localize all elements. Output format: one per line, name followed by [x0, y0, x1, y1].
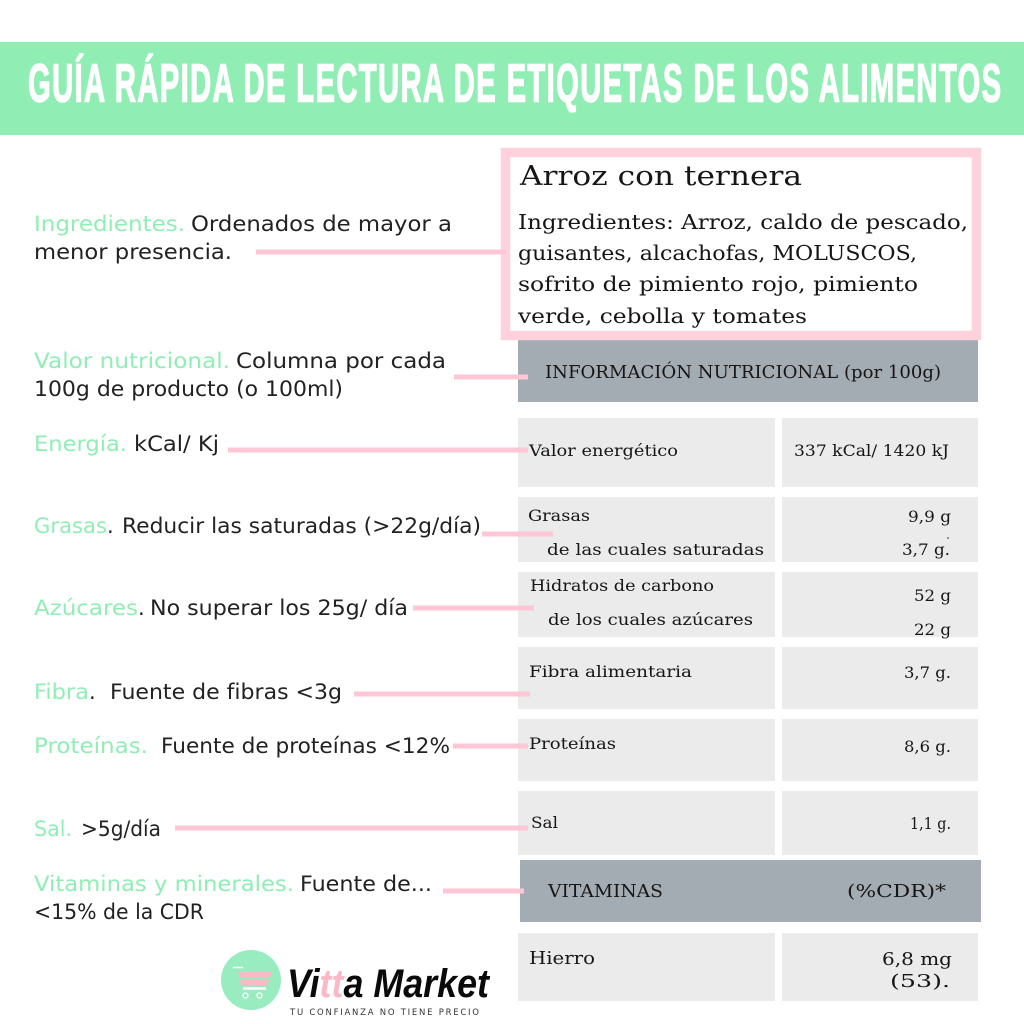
text: fibra: . — [89, 680, 96, 704]
text: azucares: No superar los 25g/ día — [150, 596, 408, 620]
row: proteinas: Proteínas — [529, 734, 616, 753]
row: valor energetico: 337 kCal/ 1420 kJ — [794, 441, 949, 460]
text: sal — [34, 817, 161, 841]
text: energia: Energía. — [34, 432, 127, 456]
text: grasas: . — [107, 514, 114, 538]
text: valor nutricional: Valor nutricional. — [34, 349, 230, 373]
row: hierro: Hierro — [529, 948, 595, 969]
ingredients list: Ingredientes: Arroz, caldo de pescado, — [518, 210, 968, 234]
row: grasas — [528, 506, 951, 559]
vitamins header bar — [520, 860, 981, 922]
text: fibra: Fibra — [34, 680, 89, 704]
row: valor energetico: Valor energético — [528, 441, 678, 460]
row: grasas: Grasas — [528, 506, 590, 525]
row: hierro: (53). — [890, 971, 950, 992]
row: hierro — [529, 948, 952, 992]
row: proteinas: 8,6 g. — [904, 737, 951, 756]
logo tagline: TU CONFIANZA NO TIENE PRECIO — [289, 1008, 479, 1018]
text: valor nutricional — [34, 349, 446, 401]
text: proteinas: Proteínas. — [34, 734, 148, 758]
text: azucares: . — [138, 596, 145, 620]
nutrition table cells — [518, 418, 978, 1001]
title banner — [0, 42, 1024, 135]
text: azucares — [34, 596, 408, 620]
row: vitaminas heading — [547, 881, 946, 902]
row: fibra: Fibra alimentaria — [529, 662, 693, 681]
row: sal: Sal — [531, 813, 558, 832]
row: valor energetico — [528, 441, 949, 460]
text: vitaminas y minerales — [34, 872, 432, 924]
row: grasas: 9,9 g — [908, 507, 951, 526]
text: vitaminas y minerales: Vitaminas y minerales. — [34, 872, 294, 896]
title: GUÍA RÁPIDA DE LECTURA DE ETIQUETAS DE LOS ALIMENTOS — [28, 54, 1001, 114]
row: vitaminas heading: (%CDR)* — [847, 881, 946, 902]
text: vitaminas y minerales: Fuente de... — [300, 872, 432, 896]
row: sal — [531, 813, 951, 833]
text: ingredientes — [34, 212, 452, 264]
text: energia: kCal/ Kj — [134, 432, 219, 456]
text: fibra: Fuente de fibras <3g — [110, 680, 342, 704]
text: ingredientes: Ingredientes. — [34, 212, 185, 236]
ingredients label box — [506, 152, 976, 336]
row: proteinas — [529, 734, 951, 756]
icon: shopping cart — [221, 950, 281, 1010]
row: hidratos — [530, 576, 951, 639]
text: vitaminas y minerales: <15% de la CDR — [34, 900, 204, 924]
ingredients list: guisantes, alcachofas, MOLUSCOS, — [518, 241, 917, 265]
logo: Vitta Market — [221, 950, 490, 1018]
row: hidratos: de los cuales azúcares — [548, 610, 753, 629]
nutrition header bar — [518, 340, 978, 402]
text: proteinas — [34, 734, 450, 758]
text: grasas: Grasas — [34, 514, 107, 538]
text: grasas: Reducir las saturadas (>22g/día) — [122, 514, 481, 538]
text: azucares: Azúcares — [34, 596, 138, 620]
row: fibra: 3,7 g. — [904, 663, 951, 682]
table heading: INFORMACIÓN NUTRICIONAL (por 100g) — [545, 360, 941, 383]
text: proteinas: Fuente de proteínas <12% — [161, 734, 450, 758]
ingredients list — [517, 210, 968, 328]
row: vitaminas heading: VITAMINAS — [547, 881, 663, 902]
logo wordmark: Vitta Market — [287, 962, 490, 1006]
text: valor nutricional: Columna por cada — [236, 349, 446, 373]
text: valor nutricional: 100g de producto (o 100ml) — [34, 377, 343, 401]
text: ingredientes: menor presencia. — [34, 240, 232, 264]
row: grasas: de las cuales saturadas — [547, 540, 764, 559]
text: ingredientes: Ordenados de mayor a — [191, 212, 452, 236]
text: energia — [34, 432, 219, 456]
connector lines — [175, 250, 553, 894]
ingredients list: verde, cebolla y tomates — [517, 304, 807, 328]
product name: Arroz con ternera — [519, 161, 802, 192]
row: fibra — [529, 662, 951, 682]
row: sal: 1,1 g. — [910, 814, 951, 833]
row: hierro: 6,8 mg — [882, 949, 952, 970]
row: grasas: 3,7 g. — [902, 540, 950, 559]
row: hidratos: Hidratos de carbono — [530, 576, 714, 595]
text: sal: Sal. — [34, 817, 72, 841]
row: hidratos: 52 g — [914, 586, 951, 605]
ingredients list: sofrito de pimiento rojo, pimiento — [518, 272, 918, 296]
row: hidratos: 22 g — [914, 620, 951, 639]
text: sal: >5g/día — [81, 817, 161, 841]
